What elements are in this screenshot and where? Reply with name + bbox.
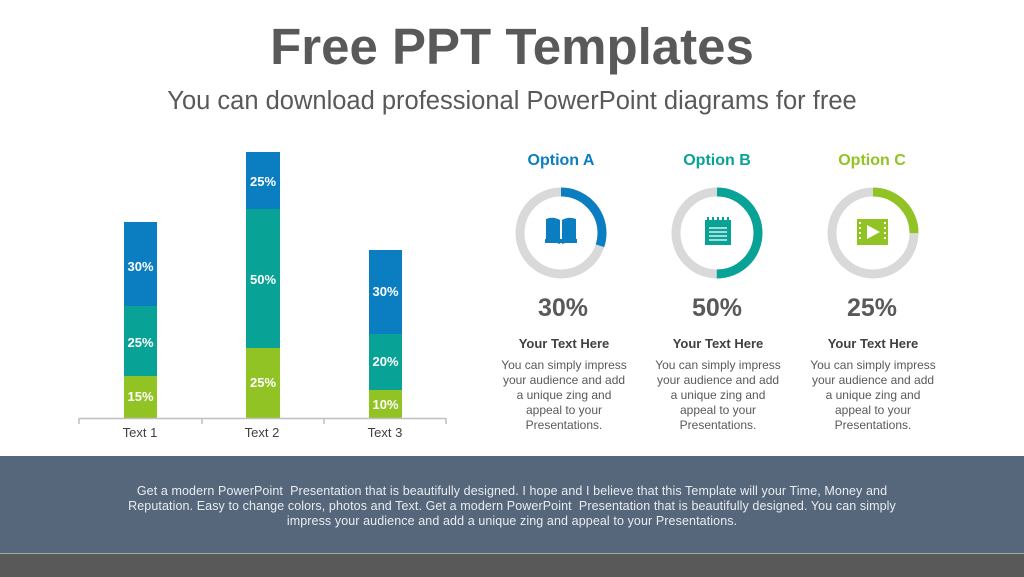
text block B: a unique zing and xyxy=(671,388,765,402)
option B xyxy=(676,152,758,322)
bottom strip xyxy=(0,553,1024,577)
text block B xyxy=(655,336,781,432)
text block B: Your Text Here xyxy=(673,336,763,351)
text block C: Your Text Here xyxy=(828,336,918,351)
donut C xyxy=(832,192,914,274)
option A: 30% xyxy=(538,294,588,322)
option A: Option A xyxy=(528,152,595,169)
text block A: appeal to your xyxy=(526,403,602,417)
text block C xyxy=(810,336,936,432)
axis labels: Text 3 xyxy=(368,425,402,440)
text block B: Presentations. xyxy=(680,418,756,432)
bar: Text 3: 30% xyxy=(372,284,399,299)
axis labels: Text 1 xyxy=(123,425,157,440)
text block C: appeal to your xyxy=(835,403,911,417)
text block B: appeal to your xyxy=(680,403,756,417)
axis xyxy=(79,418,446,424)
footer band xyxy=(0,456,1024,553)
text block C: your audience and add xyxy=(812,373,934,387)
text block B: your audience and add xyxy=(657,373,779,387)
axis labels xyxy=(123,425,402,440)
icon: book xyxy=(545,218,577,244)
text block C: You can simply impress xyxy=(810,358,936,372)
bar: Text 2: 25% xyxy=(250,174,276,189)
text block B: You can simply impress xyxy=(655,358,781,372)
bar: Text 3: 10% xyxy=(372,397,399,412)
option C xyxy=(832,152,914,322)
bar: Text 2 xyxy=(246,152,280,418)
option C: Option C xyxy=(838,152,906,169)
icon: video xyxy=(857,219,888,245)
option B: Option B xyxy=(683,152,751,169)
text block C: a unique zing and xyxy=(826,388,920,402)
axis labels: Text 2 xyxy=(245,425,279,440)
bar chart xyxy=(79,152,446,440)
option B: 50% xyxy=(692,294,742,322)
bar: Text 1: 15% xyxy=(127,389,154,404)
bar: Text 1: 25% xyxy=(127,335,154,350)
bar: Text 3: 20% xyxy=(372,354,399,369)
text block A: Your Text Here xyxy=(519,336,609,351)
footer text: impress your audience and add a unique zing and appeal to your Presentations. xyxy=(287,514,737,528)
bar: Text 2: 50% xyxy=(250,272,276,287)
bar: Text 1: 30% xyxy=(127,259,154,274)
footer text xyxy=(128,484,896,528)
donut B xyxy=(676,192,758,274)
footer text: Get a modern PowerPoint Presentation that is beautifully designed. I hope and I believe that this Template will your Time, Money and xyxy=(137,484,887,498)
bar: Text 2: 25% xyxy=(250,375,276,390)
bar: Text 3 xyxy=(369,250,402,418)
main graphics xyxy=(78,152,918,440)
donut A xyxy=(520,192,602,274)
bar: Text 1 xyxy=(124,222,157,418)
text block A: a unique zing and xyxy=(517,388,611,402)
text block A xyxy=(501,336,627,432)
option A xyxy=(520,152,602,322)
text block A: your audience and add xyxy=(503,373,625,387)
option C: 25% xyxy=(847,294,897,322)
text block A: You can simply impress xyxy=(501,358,627,372)
text block C: Presentations. xyxy=(835,418,911,432)
footer text: Reputation. Easy to change colors, photos and Text. Get a modern PowerPoint Presentation that is beautifully designed. You can simply xyxy=(128,499,896,513)
subtitle: You can download professional PowerPoint diagrams for free xyxy=(167,87,857,115)
text block A: Presentations. xyxy=(526,418,602,432)
title: Free PPT Templates xyxy=(270,18,754,75)
icon: notepad xyxy=(705,217,731,245)
